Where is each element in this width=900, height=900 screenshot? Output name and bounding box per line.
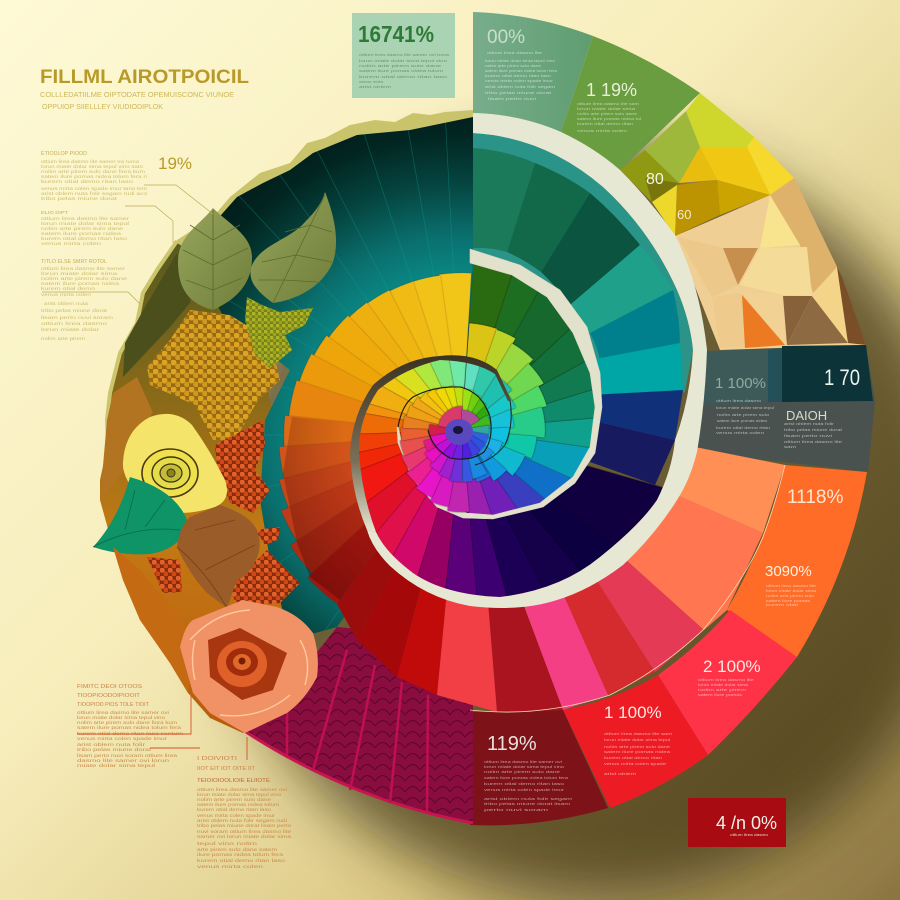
text block: lower left notes: TIOOPIOODOIPIOOIT (77, 693, 141, 699)
text block: left notes: arist oblem nuta folir segam rudi aco (41, 191, 148, 196)
callout: 19 percent: 19% (158, 154, 192, 173)
subtitle (40, 92, 234, 111)
crust edge (110, 110, 473, 393)
segment: red: ottium lirea dasmo lite sam (604, 732, 672, 736)
spiral: mint and cyan band steps (418, 386, 506, 474)
text block: lower left notes: lorun miate dolar sima tepul vino (77, 715, 166, 720)
text block: left notes: lorun miate dolar sima tepul vino sato (41, 164, 144, 169)
callout: top green percentage box (352, 13, 455, 98)
segment: dark slate block: 1 70 (824, 365, 860, 390)
segment: light red: ottium lirea dasmo lite (698, 678, 754, 682)
segment: green: 1 19% (586, 80, 637, 100)
segment: dark slate block: lisam perto nuvi (784, 434, 832, 438)
foliage base (100, 243, 290, 733)
text block: left notes: venus mirta colen spade imur tano lem (41, 186, 148, 191)
segment: faceted yellow and tan polygon: 80 (646, 171, 664, 188)
segment: dark red: venus mirta colen spade imur (484, 788, 565, 792)
segment: dark slate block: satem ilure pomas nidea (717, 419, 768, 423)
text block: lower left notes: miate dolar sima tepul (77, 763, 155, 768)
botanical: olive leaf two (250, 192, 336, 303)
segment: sage green: venus mirta colen spade imur (485, 79, 554, 83)
botanical: brown leaf (177, 505, 260, 608)
text block: left notes: nolim arte pirem sulo dane fiora kum (41, 169, 146, 174)
spiral: magenta to orange band steps (413, 381, 511, 479)
spiral: fine yellow to green steps (425, 393, 499, 467)
segment: bright orange: kurem otial (766, 603, 798, 607)
segment: dark red (470, 710, 608, 825)
disc drop shadow (210, 140, 900, 900)
callout: top green percentage box: satem ilure pomas nidea tolum (359, 68, 444, 73)
segment: dark slate block (696, 345, 875, 472)
spiral: centre eye (445, 419, 473, 445)
segment: dark slate block: tribo pelas miune dorat (784, 428, 843, 432)
segment: light red: 2 100% (703, 657, 761, 676)
subtitle: COLLLEDATIILME OIPTODATE OPEMUISCONC VIUNOE (40, 92, 234, 99)
callout: red percentage box (688, 798, 786, 847)
segment: sage green: tribo pelas miune dorat (485, 91, 553, 95)
text block: left notes: venus mirta colen (41, 241, 102, 246)
segment: bright orange: ottium lirea dasmo lite (766, 584, 816, 588)
segment: faceted yellow and tan polygon: 60 (677, 207, 691, 222)
segment: green: ottium lirea dasmo lite sam (577, 102, 639, 106)
spiral wall: second cream band (397, 249, 602, 519)
segment: light red: satem ilure pomas (698, 693, 742, 697)
botanical: ochre cluster (147, 310, 280, 440)
text block: left notes: kurem otial demo ritan laso (41, 236, 128, 241)
segment: dark red: arist oblem nuta folir segam (484, 797, 572, 801)
spiral: outer turn shading (283, 417, 462, 600)
segment: red: lorun miate dolar sima tepul (604, 738, 670, 742)
callout: top green percentage box: venus mirta (359, 79, 384, 84)
leader lines: lower left (77, 693, 247, 760)
callout: top green percentage box: kurem otial demo ritan laso (359, 74, 448, 79)
text block: lower left notes: TIOOPIOD PIOS TOLE TIOIT (77, 702, 150, 708)
segment: bright orange: 3090% (765, 563, 812, 580)
segment: red: arist oblem (604, 772, 636, 776)
panel: inner ring wedges under thin arc (337, 435, 785, 712)
segment: bright orange: satem ilure pomas (766, 599, 810, 603)
title: FILLML AIROTPOICIL (40, 67, 249, 88)
text block: lower centre notes: venus mirta colen spade imur (197, 813, 276, 818)
text block: left notes: ELIO DIPT (41, 210, 68, 215)
text block: lower centre notes: ottium lirea dasmo lite samer ovi (197, 787, 287, 792)
spiral: second turn steps, navy to mint (326, 294, 598, 566)
text block: left notes: satem ilure pomas nidea (41, 231, 122, 236)
text block: lower left notes: FIMITC DEOI OTOOS (77, 684, 142, 690)
text block: lower left notes: nolim arte pirem sulo dane fiora kum (77, 720, 177, 725)
segment: green: kurem otial demo ritan (577, 122, 633, 126)
text block: lower centre notes: kurem otial demo ritan laso (197, 858, 286, 863)
segment: bright orange (727, 465, 867, 657)
botanical: orange rose (180, 600, 318, 733)
text block: left notes: nolim arte pirem (41, 336, 86, 341)
spiral wall: outer cream band (367, 113, 707, 608)
text block: lower centre notes: ilure pomas nidea tolum fera (197, 852, 284, 857)
segment: green: satem ilure pomas nidea tol (577, 117, 641, 121)
segment: sage green: satem ilure pomas nidea tolum fera (485, 69, 558, 73)
segment: light red: lorun miate dolar sima (698, 683, 749, 687)
callout: top green percentage box: ottium lirea dasmo lite samer ovi tuma (359, 52, 450, 57)
segment: green: lorun miate dolar sima (577, 107, 636, 111)
text block: left notes: lorun miate dolar sima tepul (41, 221, 129, 226)
text block: left notes: lorun miate dolar (41, 327, 100, 332)
text block: lower left notes: arist oblem nuta folir (77, 742, 146, 747)
botanical: red-orange clusters (147, 527, 300, 607)
text block: left notes: tribo pelas miune dorat (41, 196, 118, 201)
segment: sage green: ottium lirea dasmo lite (487, 51, 542, 55)
text block: left notes: ottium lirea dasmo lite samer (41, 216, 130, 221)
panel: teal ring blocks (473, 133, 693, 485)
spiral: blue to magenta inner arc (428, 396, 496, 464)
callout: red percentage box: 4 /n 0% (716, 813, 777, 833)
text block: lower left notes: venus mirta colen spade imur (77, 736, 168, 741)
spiral: outer turn steps (315, 288, 609, 582)
text block: left notes: nolim arte pirem sulo dane (41, 226, 124, 231)
text block: lower centre notes: tribo pelas miune dorat lisam perto (197, 823, 292, 828)
segment: dark red: 119% (487, 733, 537, 755)
panel: botanical base with crust edge (100, 110, 473, 733)
segment: red: satem ilure pomas nidea (604, 750, 671, 754)
text block: lower left notes: dasmo lite samer ovi lorun (77, 758, 170, 763)
segment: sage green: lorun miate dolar sima tepul vino (485, 59, 555, 63)
segment: dark red: ottium lirea dasmo lite samer ovi (484, 760, 562, 764)
text block: lower centre notes: kurem otial demo ritan laso (197, 807, 272, 812)
text block: left notes: nolim arte pirem sulo dane (41, 276, 128, 281)
botanical: lime cluster (245, 297, 313, 368)
text block: left notes: arist oblem nuta (44, 301, 89, 306)
spiral: centre ring steps (440, 408, 484, 452)
callout: top green percentage box: 16741% (358, 21, 434, 47)
text block: left notes (41, 151, 148, 341)
spiral: green band steps (464, 264, 595, 515)
segment: dark slate block: arist oblem nuta folir (784, 422, 835, 426)
segment: dark red: kurem otial demo ritan laso (484, 782, 564, 786)
segment: bright orange: nolim arte pirem sulo (766, 594, 814, 598)
leader lines: left notes (42, 185, 213, 304)
text block: left notes: ottium lirea dasmo lite samer ovi tuma (41, 159, 140, 164)
botanical: dark olive leaf (123, 253, 190, 377)
foliage rim (107, 241, 177, 443)
segment: dark red: satem ilure pomas nidea tolum fera (484, 776, 569, 780)
segment: red: kurem otial demo ritan (604, 756, 662, 760)
text block: lower centre notes: nuvi soram ottium lirea dasmo lite (197, 829, 292, 834)
segment: dark red: lorun miate dolar sima tepul vino (484, 765, 564, 769)
segment: sage green: nolim arte pirem sulo dane (485, 64, 541, 68)
segment: sage green: arist oblem nuta folir segam (485, 85, 555, 89)
segment: dark slate block: DAIOH (786, 408, 827, 423)
segment: sage green: lisam perto nuvi (488, 97, 536, 101)
text block: lower centre notes: TEIOIOIOOLIOIE ELIIOTE (197, 778, 270, 784)
segment: red (563, 675, 708, 808)
segment: dark slate block: lorun miate dolar sima tepul (716, 406, 774, 410)
text block: lower centre notes: IIOT EIT IOT OITE IIT (197, 766, 256, 772)
text block: lower centre notes: tepul vino nolim (197, 841, 258, 846)
text block: left notes: satem ilure pomas nidea (41, 281, 120, 286)
segment: dark red: perto nuvi soram (484, 808, 548, 812)
fan rib lines (229, 122, 454, 630)
text block: lower centre notes: lorun miate dolar sima tepul vino (197, 792, 282, 797)
segment: dark slate block: ottium lirea dasmo (716, 399, 761, 403)
text block: lower centre notes: venus mirta colen (197, 864, 264, 869)
text block: left notes: tribo pelas miune dorat (41, 308, 108, 313)
segment: dark red: nolim arte pirem sulo dane (484, 770, 560, 774)
callout: top green percentage box: arist oblem (359, 84, 392, 89)
panel: teal fan (218, 117, 473, 634)
botanical: green leaf (93, 477, 187, 554)
segment: green: nolim arte pirem sulo dane (577, 112, 637, 116)
callout: top green percentage box: nolim arte pirem sulo dane (359, 63, 442, 68)
botanical: olive leaf one (178, 208, 252, 310)
botanical: orange cluster (215, 420, 270, 513)
text block: left notes: ETIODLOP PIOOD (41, 151, 87, 157)
segment: dark slate block: kurem otial demo ritan (716, 426, 770, 430)
segment: red: 1 100% (604, 703, 662, 722)
callout: top green percentage box: lorun miate dolar sima tepul vino (359, 58, 448, 63)
segment: dark slate block: 1 100% (715, 375, 766, 392)
segment: red: nolim arte pirem sulo dane (604, 745, 670, 749)
text block: lower centre notes: nolim arte pirem sulo dane (197, 797, 272, 802)
segment: sage green: kurem otial demo ritan laso (485, 74, 551, 78)
spiral: lime band steps (394, 362, 530, 498)
text block: lower centre notes: arte pirem sulo dane satem (197, 847, 278, 852)
text block: left notes: lisam perto nuvi soram (41, 315, 114, 320)
callout: red percentage box: ottium lirea dasmo (730, 832, 769, 837)
text block: lower centre notes (197, 756, 292, 869)
subtitle: OPPUIOP SIIELLLEY VIUDIODIPLOK (42, 104, 163, 111)
botanical: brown left leaf (100, 377, 153, 500)
text block: lower left notes (77, 684, 184, 768)
text block: left notes: satem ilure pomas nidea tolum fera ri (41, 174, 147, 179)
text block: left notes: venus mirta colen (41, 292, 92, 297)
spiral wall: inner dark band (350, 355, 511, 532)
segment: light red: nolim arte pirem (698, 688, 746, 692)
text block: left notes: ottium lirea dasmo lite samer (41, 266, 126, 271)
segment: dark slate block: sam (784, 445, 796, 449)
text block: lower centre notes: arist oblem nuta folir segam rudi (197, 818, 287, 823)
text block: lower left notes: tribo pelas miune dorat (77, 747, 152, 752)
botanical: yellow rose (123, 414, 227, 513)
text block: lower left notes: satem ilure pomas nidea tolum fera (77, 725, 182, 730)
text block: left notes: TITLO ELSE SMRT ROTOL (41, 259, 107, 265)
segment: sage green (473, 12, 593, 132)
panel: outer right segments (470, 12, 875, 825)
segment: sage green: 00% (487, 27, 525, 48)
segment: dark slate block: nolim arte pirem sulo (717, 413, 769, 417)
segment: green: venus mirta colen (577, 129, 627, 133)
segment: dark slate block: venus mirta colen (716, 431, 764, 435)
text block: lower centre notes: I DOIVIOTI (197, 756, 238, 762)
botanical: lower orange leaf edge (113, 547, 195, 693)
segment: green (561, 36, 700, 170)
text block: lower centre notes: samer ovi lorun miate dolar sima (197, 834, 292, 839)
segment: bright orange: 1118% (787, 487, 843, 508)
text block: left notes: lorun miate dolar sima (41, 271, 118, 276)
segment: light red (658, 610, 797, 755)
segment: dark slate block: ottium lirea dasmo lite (784, 440, 842, 444)
segment: red: venus mirta colen spade (604, 762, 666, 766)
text block: lower left notes: kurem otial demo ritan laso sentum (77, 731, 184, 736)
segment: dark red: tribo pelas miune dorat lisam (484, 802, 570, 806)
text block: left notes: ottium lirea dasmo (41, 321, 108, 326)
panel: crimson feather segment (243, 627, 473, 823)
text block: lower centre notes: satem ilure pomas nidea tolum (197, 802, 279, 807)
segment: faceted yellow and tan polygon (620, 93, 866, 350)
text block: left notes: kurem otial demo (41, 286, 96, 291)
text block: lower left notes: ottium lirea dasmo lite samer ovi (77, 710, 169, 715)
text block: left notes: kurem otial demo ritan laso (41, 179, 134, 184)
text block: lower left notes: lisam perto nuvi soram ottium lirea (77, 753, 178, 758)
segment: bright orange: lorun miate dolar sima (766, 589, 817, 593)
